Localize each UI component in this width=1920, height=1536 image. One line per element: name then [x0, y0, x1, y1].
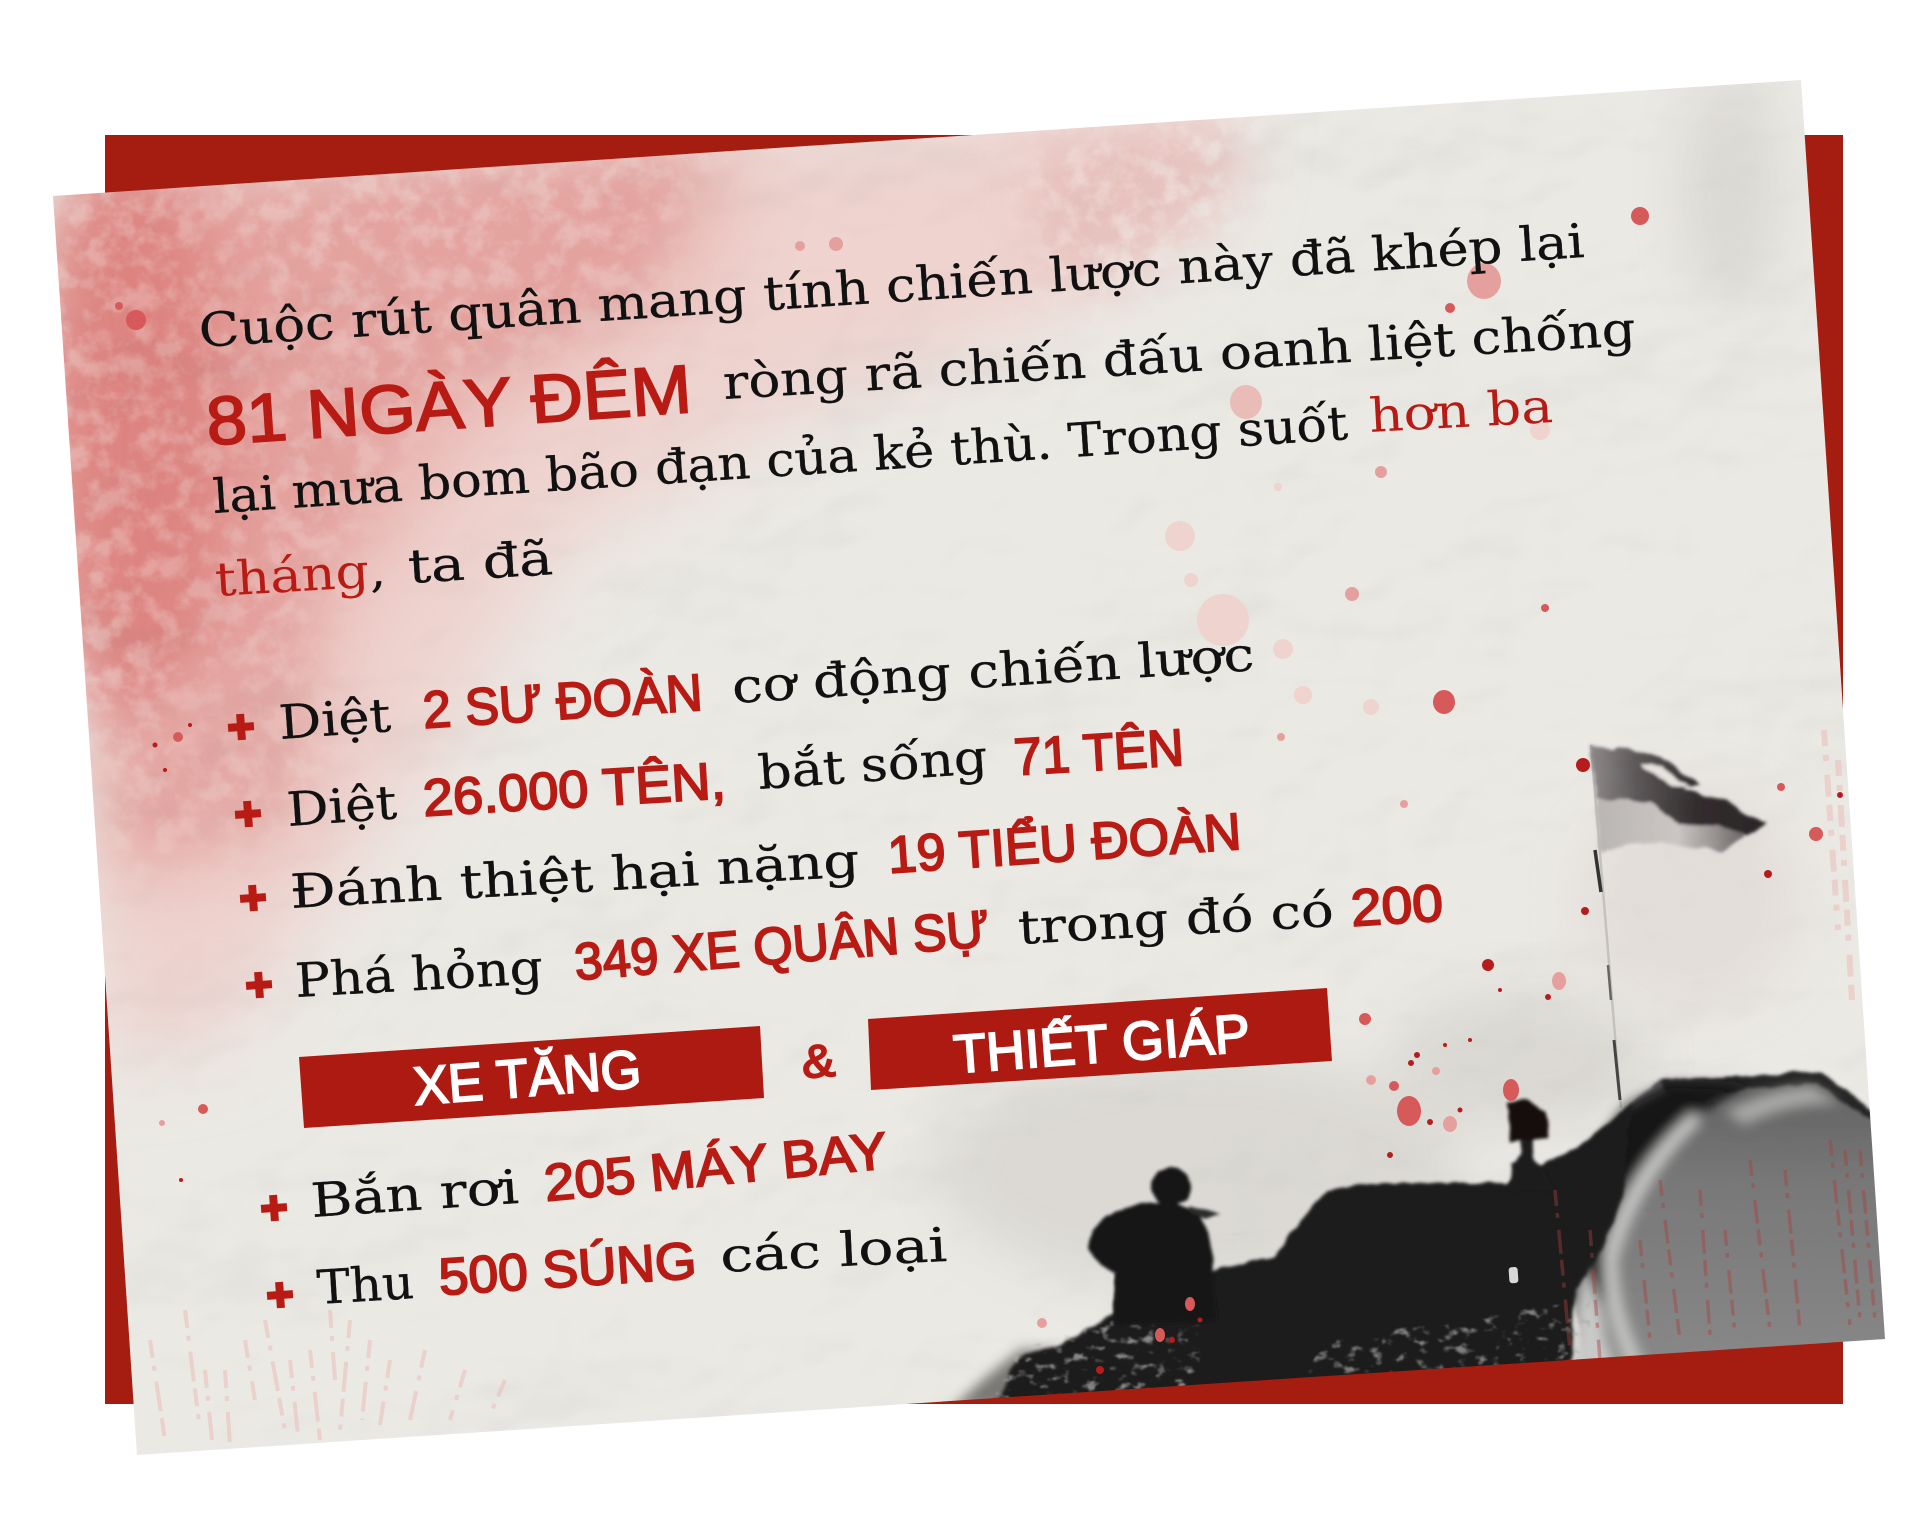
icon: plus [245, 971, 273, 999]
label box: xe tăng: XE TĂNG [411, 1039, 643, 1117]
line 2: ròng rã chiến đấu oanh liệt chống [721, 302, 1637, 411]
highlight: hơn ba: hơn ba [1368, 379, 1554, 444]
highlight: tháng: tháng , [213, 543, 387, 608]
red backing panel [105, 135, 1843, 1404]
grey crease shadows [940, 80, 1780, 1290]
item: 500 súng: Thu [315, 1255, 416, 1316]
red streaks over hill [1555, 1140, 1875, 1360]
item: 19 tiểu đoàn [239, 802, 1243, 920]
item: 26.000 tên: bắt sống [756, 730, 989, 801]
item: 2 sư đoàn: 2 SƯ ĐOÀN [421, 664, 704, 740]
red wash stain [30, 90, 1250, 1060]
item: 205 máy bay: Bắn rơi [309, 1160, 520, 1229]
line 4: ta đã [406, 531, 554, 595]
item: 2 sư đoàn [227, 627, 1256, 751]
item: 2 sư đoàn: cơ động chiến lược [730, 627, 1256, 715]
item: 500 súng [266, 1218, 948, 1316]
heading: 81 ngày đêm: 81 NGÀY ĐÊM [204, 351, 694, 460]
item: 19 tiểu đoàn: 19 TIỂU ĐOÀN [886, 802, 1243, 885]
bunker and ground [960, 1104, 1632, 1420]
hill shading [1572, 1074, 1842, 1360]
turret figure [1506, 1100, 1552, 1190]
flag [1591, 744, 1767, 853]
item: 19 tiểu đoàn: Đánh thiệt hại nặng [289, 833, 861, 920]
label box: thiết giáp [868, 988, 1332, 1090]
label box: thiết giáp: THIẾT GIÁP [951, 1003, 1252, 1085]
item: 349 xe quân sự [245, 874, 1445, 1009]
icon: plus [227, 713, 255, 741]
haze behind flag [1595, 837, 1785, 995]
item: 205 máy bay: 205 MÁY BAY [542, 1122, 890, 1213]
blood splatters [115, 207, 1843, 1374]
item: 349 xe quân sự: 200 [1349, 874, 1445, 938]
icon: plus [239, 884, 267, 912]
soldier [1089, 1168, 1220, 1325]
ground texture [990, 1300, 1590, 1405]
icon: plus [234, 800, 262, 828]
item: 2 sư đoàn: Diệt [277, 688, 393, 751]
item: 349 xe quân sự: Phá hỏng [294, 940, 544, 1009]
ground fade [950, 1350, 1060, 1410]
line 1: Cuộc rút quân mang tính chiến lược này đã khép lại [197, 214, 1586, 359]
list: battle results [227, 627, 1445, 1316]
item: 205 máy bay [260, 1122, 890, 1229]
item: 26.000 tên: Diệt [285, 775, 399, 838]
item: 26.000 tên [234, 719, 1185, 838]
line 3: lại mưa bom bão đạn của kẻ thù. Trong suốt [211, 396, 1349, 525]
hill [1574, 1068, 1885, 1358]
icon: plus [266, 1281, 294, 1309]
icon: plus [260, 1194, 288, 1222]
white gap in bunker [1508, 1267, 1519, 1283]
pink streaks bottom-left and right edge [150, 700, 1856, 1445]
item: 349 xe quân sự: 349 XE QUÂN SỰ [572, 900, 992, 992]
item: 500 súng: các loại [719, 1218, 948, 1284]
item: 26.000 tên: 26.000 TÊN, [421, 752, 727, 828]
item: 26.000 tên: 71 TÊN [1012, 719, 1185, 787]
text block: intro paragraph [197, 214, 1637, 608]
ampersand: & [800, 1034, 837, 1088]
photo: flag and soldiers silhouette [950, 744, 1900, 1420]
flag pole [1591, 745, 1621, 1108]
item: 500 súng: 500 SÚNG [437, 1232, 698, 1307]
label box: xe tăng [299, 1026, 764, 1128]
item: 349 xe quân sự: trong đó có [1017, 883, 1335, 956]
